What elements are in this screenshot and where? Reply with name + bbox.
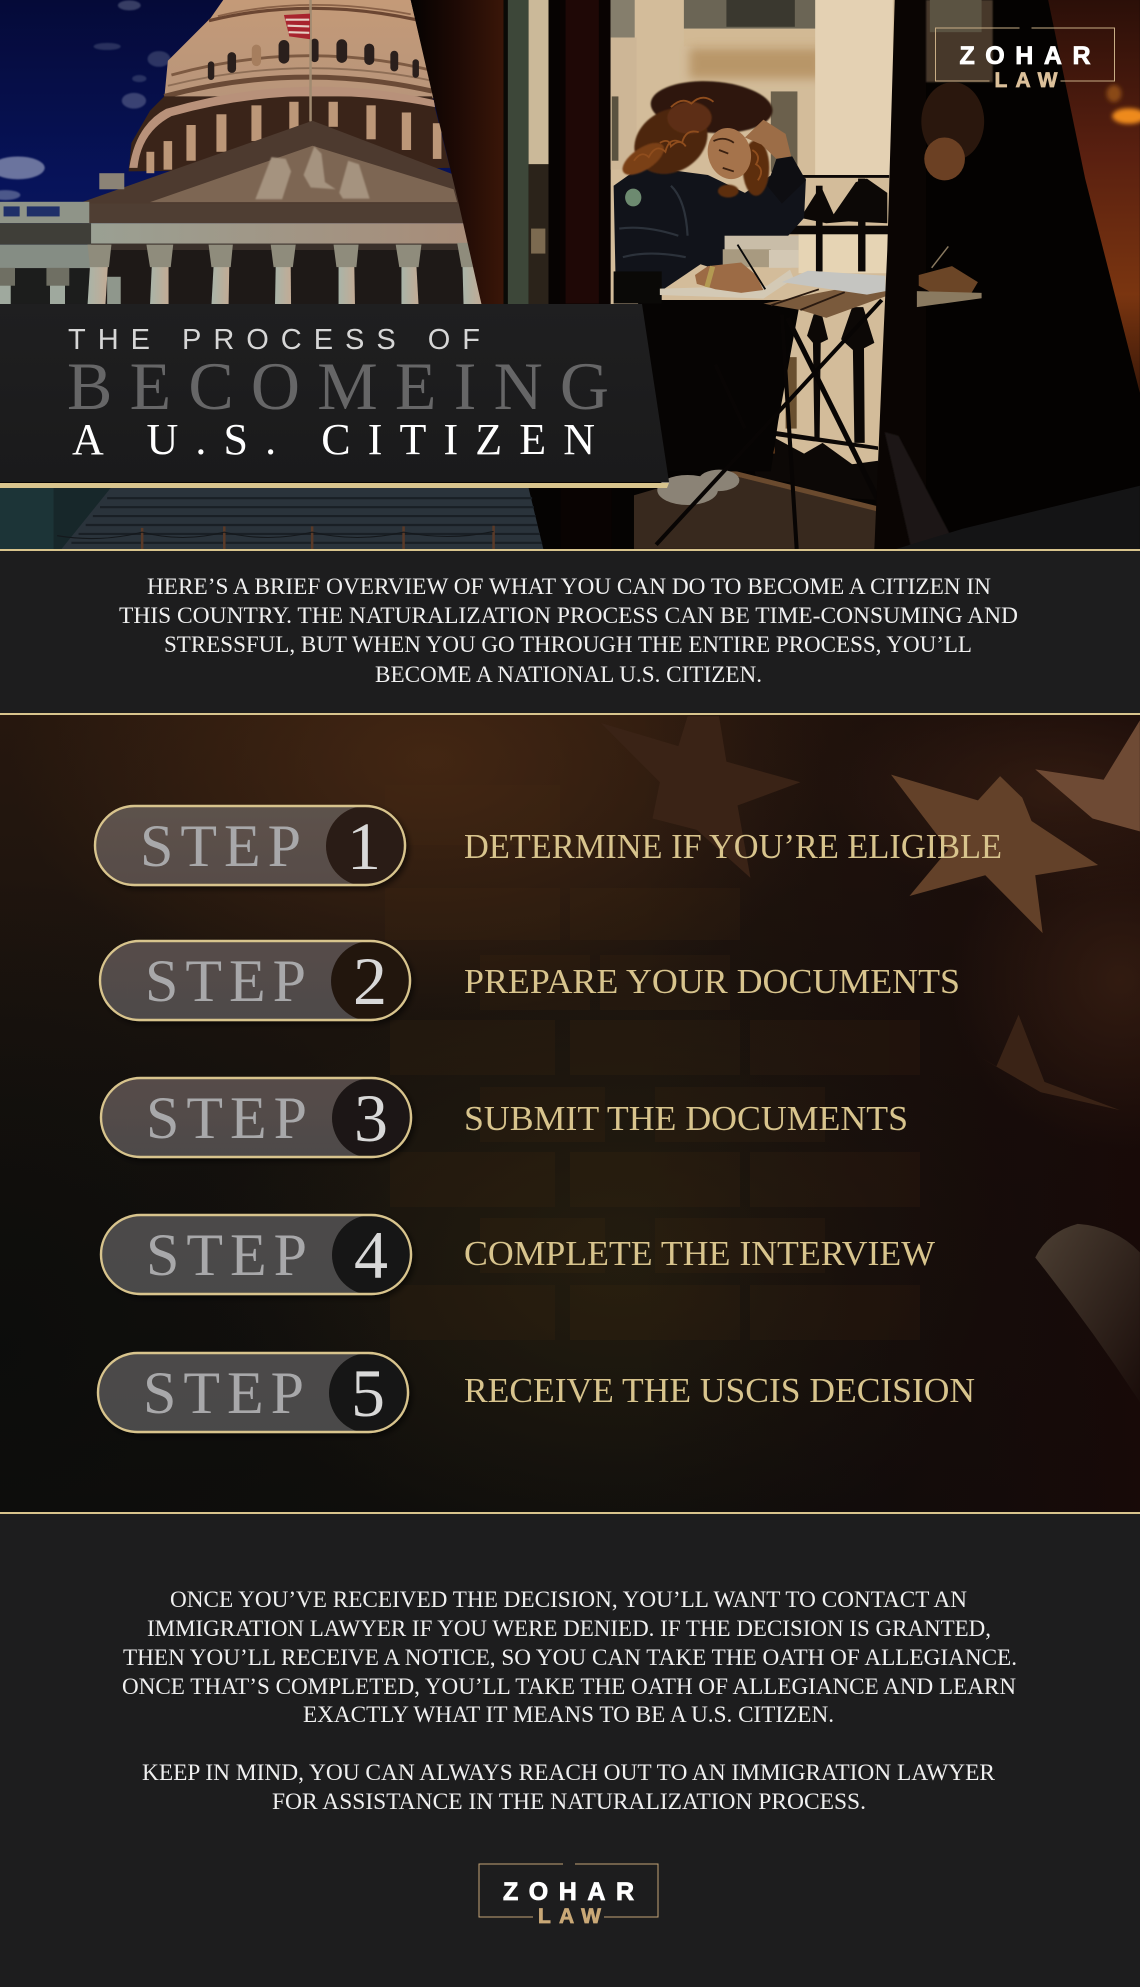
label: step 3: SUBMIT THE DOCUMENTS — [464, 1099, 908, 1138]
title panel — [0, 304, 669, 488]
woman — [614, 77, 806, 505]
label: step 2: PREPARE YOUR DOCUMENTS — [464, 962, 960, 1001]
curly hair — [617, 77, 774, 198]
label: step 5: RECEIVE THE USCIS DECISION — [464, 1371, 975, 1410]
step 4 row — [101, 1209, 935, 1299]
pill: step 2: STEP — [145, 948, 306, 1014]
closing text: EXACTLY WHAT IT MEANS TO BE A U.S. CITIZEN. — [303, 1702, 834, 1727]
pill: step 5: 5 — [351, 1355, 385, 1431]
hero photo collage — [0, 0, 1140, 552]
dark window frame and reflection — [874, 0, 1140, 550]
step 3 row — [101, 1072, 908, 1162]
closing text: ONCE YOU’VE RECEIVED THE DECISION, YOU’LL WANT TO CONTACT AN — [170, 1587, 967, 1612]
curtain and window post — [410, 0, 548, 304]
left wing of building — [0, 173, 124, 304]
capitol building against night sky — [0, 0, 563, 307]
pill: step 4: 4 — [354, 1217, 388, 1293]
step 2 row — [100, 935, 960, 1025]
pill: step 2: 2 — [353, 943, 387, 1019]
logo: Zohar Law bottom — [479, 1864, 658, 1928]
label: step 1: DETERMINE IF YOU’RE ELIGIBLE — [464, 827, 1002, 866]
pill: step 3: 3 — [354, 1080, 388, 1156]
pill: step 3: STEP — [146, 1085, 307, 1151]
gold divider under hero — [0, 549, 1140, 551]
gold strip under title panel — [0, 483, 669, 488]
ironwork balcony railing — [772, 175, 890, 464]
logo: Zohar Law bottom: LAW — [538, 1905, 601, 1928]
intro text: THIS COUNTRY. THE NATURALIZATION PROCESS CAN BE TIME-CONSUMING AND — [119, 603, 1018, 628]
pill: step 5 — [96, 1352, 411, 1434]
title line 3: A U.S. CITIZEN — [72, 415, 595, 464]
closing text: IMMIGRATION LAWYER IF YOU WERE DENIED. IF THE DECISION IS GRANTED, — [147, 1616, 991, 1641]
intro text: STRESSFUL, BUT WHEN YOU GO THROUGH THE ENTIRE PROCESS, YOU’LL — [164, 632, 972, 657]
intro text: HERE’S A BRIEF OVERVIEW OF WHAT YOU CAN DO TO BECOME A CITIZEN IN — [147, 574, 991, 599]
closing text: FOR ASSISTANCE IN THE NATURALIZATION PROCESS. — [272, 1789, 866, 1814]
pill: step 4: STEP — [146, 1222, 307, 1288]
balcony floor — [630, 471, 878, 549]
closing text: THEN YOU’LL RECEIVE A NOTICE, SO YOU CAN TAKE THE OATH OF ALLEGIANCE. — [123, 1645, 1017, 1670]
balcony scene with woman writing — [560, 0, 1140, 550]
label: step 4: COMPLETE THE INTERVIEW — [464, 1234, 935, 1273]
pill: step 1: STEP — [140, 813, 301, 879]
books, notebook and table — [656, 236, 885, 549]
logo: Zohar Law top right — [936, 28, 1114, 92]
pill: step 5: STEP — [143, 1360, 304, 1426]
step 5 row — [98, 1347, 975, 1437]
pill: step 1: 1 — [347, 808, 381, 884]
flag and flagpole — [284, 0, 312, 121]
gold divider above steps — [0, 713, 1140, 715]
title line 2: BECOMEING — [67, 348, 609, 424]
intro text — [119, 574, 1018, 687]
flag stars and folds — [646, 716, 1140, 1383]
pill: step 3 — [101, 1072, 422, 1162]
logo: Zohar Law bottom: ZOHAR — [503, 1878, 634, 1906]
panel: steps background with flag — [0, 715, 1140, 1512]
intro text: BECOME A NATIONAL U.S. CITIZEN. — [375, 662, 762, 687]
pill: step 4 — [101, 1209, 422, 1299]
logo: Zohar Law top right: ZOHAR — [960, 42, 1090, 70]
capitol steps below title — [0, 488, 561, 552]
step 1 row — [95, 800, 1002, 890]
closing text: ONCE THAT’S COMPLETED, YOU’LL TAKE THE OATH OF ALLEGIANCE AND LEARN — [122, 1674, 1016, 1699]
pill: step 1 — [95, 800, 416, 890]
title line 1: THE PROCESS OF — [68, 324, 480, 356]
pill: step 2 — [100, 935, 421, 1025]
closing text — [122, 1587, 1017, 1814]
gold divider below steps — [0, 1512, 1140, 1514]
closing text: KEEP IN MIND, YOU CAN ALWAYS REACH OUT TO AN IMMIGRATION LAWYER — [142, 1760, 996, 1785]
logo: Zohar Law top right: LAW — [994, 69, 1058, 92]
